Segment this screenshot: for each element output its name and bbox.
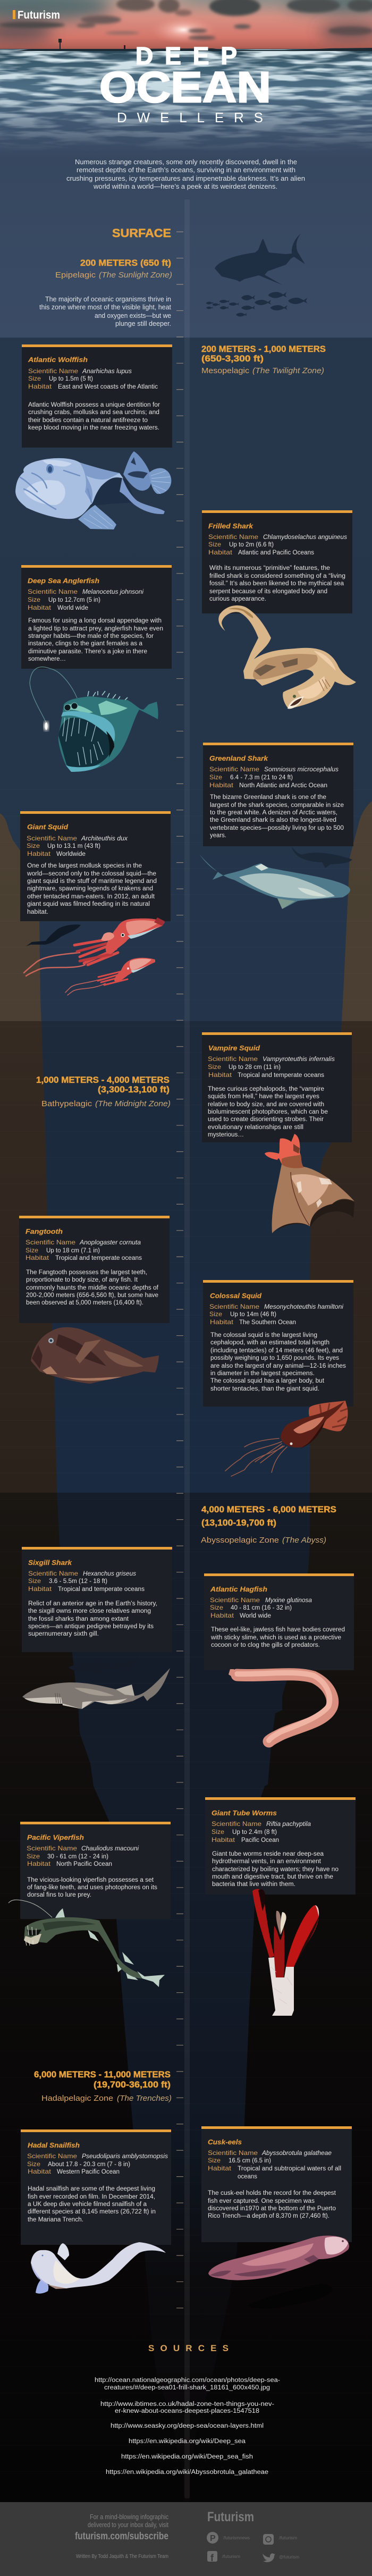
panel: Cusk-eels: Habitat (208, 2165, 232, 2172)
panel: Vampire Squid (202, 1032, 352, 1142)
panel: Greenland Shark: vertebrate species—possibly living for up to 500 (210, 825, 344, 831)
panel: Atlantic Wolffish: Size (28, 375, 41, 382)
panel: Colossal Squid: The Southern Ocean (239, 1319, 296, 1326)
panel: Colossal Squid: shorter tentacles, than the giant squid. (210, 1386, 319, 1392)
panel: Atlantic Wolffish: Atlantic Wolffish possess a unique dentition for (28, 402, 160, 408)
panel: Atlantic Hagfish: 40 - 81 cm (16 - 32 in) (231, 1605, 292, 1611)
text: source links: https://en.wikipedia.org/wiki/Abyssobrotula_galatheae (106, 2469, 268, 2476)
panel: Giant Squid: One of the largest mollusk species in the (27, 863, 142, 869)
panel: Cusk-eels: Cusk-eels (208, 2139, 242, 2146)
panel: Greenland Shark: Size (209, 773, 222, 781)
panel: Vampire Squid: Habitat (208, 1071, 232, 1079)
panel: Giant Squid: giant squid is the stuff of maritime legend and (27, 878, 157, 885)
panel: Hadal Snailfish: Hadal snailfish are some of the deepest living (28, 2186, 155, 2192)
panel: Fangtooth: Up to 18 cm (7.1 in) (46, 1248, 100, 1254)
panel: Colossal Squid: Colossal Squid (210, 1292, 261, 1300)
panel: Colossal Squid: The colossal squid is the largest living (210, 1332, 317, 1338)
icon: instagram: /futurism (279, 2536, 297, 2540)
panel: Colossal Squid: are also the largest of any animal—12-16 inches (210, 1363, 346, 1369)
icon: pinterest (207, 2532, 250, 2544)
panel: Hadal Snailfish: About 17.8 - 20.3 cm (7 - 8 in) (48, 2161, 130, 2168)
panel: Hadal Snailfish: Habitat (28, 2168, 52, 2175)
creature: atlantic hagfish (229, 1669, 333, 1741)
panel: Vampire Squid: mysterious… (208, 1132, 244, 1138)
panel: Giant Squid: Scientific Name (27, 835, 77, 842)
panel: Fangtooth: 200-2,000 meters (656-6,560 ft), but some have (26, 1292, 158, 1299)
heading: abyssopelagic: (The Abyss) (282, 1536, 326, 1545)
panel: Hadal Snailfish: a UK deep dive vehicle filmed snailfish of a (28, 2201, 147, 2208)
panel: Frilled Shark: Frilled Shark (208, 523, 253, 530)
creature: fangtooth (31, 1327, 159, 1384)
panel: Pacific Viperfish: The vicious-looking viperfish possesses a set (27, 1877, 154, 1883)
title (99, 42, 271, 125)
text: epipelagic description: The majority of oceanic organisms thrive in (45, 296, 171, 303)
panel: Fangtooth: commonly haunts the middle oceanic depths of (26, 1285, 159, 1291)
panel: Hadal Snailfish: Scientific Name (27, 2152, 77, 2160)
panel: Giant Squid: Giant Squid (27, 823, 68, 831)
panel: Cusk-eels: Tropical and subtropical waters of all (238, 2166, 341, 2172)
panel: Colossal Squid (203, 1280, 353, 1407)
panel: Atlantic Wolffish: Scientific Name (28, 367, 78, 375)
panel: Hadal Snailfish (21, 2129, 171, 2245)
panel: Vampire Squid: Scientific Name (208, 1055, 258, 1063)
panel: Atlantic Hagfish: Atlantic Hagfish (210, 1586, 267, 1593)
creature: sixgill shark with shadow (22, 1656, 170, 1709)
text: epipelagic description (39, 296, 172, 327)
intro text: Numerous strange creatures, some only recently discovered, dwell in the (75, 158, 297, 166)
creature: greenland shark pair (199, 847, 352, 909)
text: source links: http://ocean.nationalgeographic.com/ocean/photos/deep-sea- (95, 2377, 280, 2384)
creature: frilled shark (218, 605, 356, 709)
panel: Giant Tube Worms: Giant tube worms reside near deep-sea (212, 1851, 324, 1857)
panel: Atlantic Wolffish (22, 344, 172, 448)
panel: Frilled Shark: curious appearance. (209, 596, 266, 602)
panel: Sixgill Shark: Relict of an anterior age in the Earth’s history, (28, 1601, 157, 1607)
panel: Vampire Squid: squids from Hell,” have the largest eyes (208, 1093, 319, 1100)
panel: Sixgill Shark: Tropical and temperate oceans (58, 1586, 145, 1593)
panel: Sixgill Shark: Size (28, 1577, 41, 1585)
panel: Vampire Squid: Up to 28 cm (11 in) (229, 1064, 281, 1071)
panel: Frilled Shark: Up to 2m (6.6 ft) (229, 542, 274, 548)
panel: Cusk-eels: Scientific Name (208, 2149, 258, 2157)
text: epipelagic description: this zone where most of the visible light, heat (39, 304, 172, 311)
panel: Greenland Shark: The bizarre Greenland shark is one of the (210, 794, 326, 801)
icon: facebook: /futurism (222, 2554, 240, 2559)
creature: cusk-eel with shadow (208, 2236, 349, 2309)
panel: Giant Tube Worms (205, 1797, 356, 1895)
creature: giant squid pair (24, 917, 165, 995)
panel: Hadal Snailfish: different species at 8,145 meters (26,722 ft) in (28, 2209, 156, 2215)
panel: Frilled Shark: Habitat (208, 549, 233, 556)
text: source links: creatures/#/deep-sea01-frill-shark_18161_600x450.jpg (104, 2385, 270, 2391)
intro text: remotest depths of the Earth’s oceans, surviving in an environment with (77, 166, 295, 174)
panel: Colossal Squid: Size (209, 1310, 222, 1318)
title: OCEAN (99, 63, 271, 112)
logo: Futurism: Futurism (18, 9, 60, 21)
panel: Pacific Viperfish: Habitat (27, 1860, 51, 1867)
heading: 200 meters epipelagic: Epipelagic (55, 271, 96, 280)
panel: Giant Squid (20, 811, 171, 921)
panel: Vampire Squid: used to create disorienting strobes. Their (208, 1116, 324, 1123)
icon: instagram (263, 2534, 297, 2545)
panel: Fangtooth: Tropical and temperate oceans (55, 1255, 142, 1261)
icon: pinterest: P (210, 2534, 216, 2543)
panel: Giant Squid: Size (27, 842, 40, 849)
panel: Pacific Viperfish: Scientific Name (27, 1845, 77, 1852)
panel: Colossal Squid: Scientific Name (209, 1303, 259, 1310)
panel: Greenland Shark: Somniosus microcephalus (264, 767, 339, 773)
panel: Hadal Snailfish: Pseudoliparis amblystomopsis (82, 2153, 168, 2160)
panel: Giant Squid: habitat. (27, 909, 48, 915)
panel: Giant Squid: Worldwide (56, 851, 86, 857)
panel: Colossal Squid: in diameter in the largest specimens. (210, 1370, 315, 1377)
panel: Hadal Snailfish: Western Pacific Ocean (57, 2169, 120, 2175)
heading: mesopelagic: (650-3,300 ft) (201, 354, 264, 364)
panel: Giant Tube Worms: hydrothermal vents, in an environment (212, 1858, 322, 1865)
panel: Deep Sea Anglerfish: World wide (57, 605, 88, 611)
heading: 200 meters epipelagic: (The Sunlight Zone) (99, 271, 172, 280)
panel: Fangtooth: Anoplogaster cornuta (79, 1240, 141, 1246)
panel: Atlantic Wolffish: East and West coasts of the Atlantic (58, 384, 158, 390)
panel: Vampire Squid: Tropical and temperate oceans (238, 1072, 324, 1079)
panel: Deep Sea Anglerfish (21, 565, 172, 669)
icon: twitter (263, 2553, 299, 2562)
heading: hadalpelagic: Hadalpelagic Zone (41, 2094, 113, 2103)
panel: Deep Sea Anglerfish: somewhere… (28, 656, 66, 662)
panel: Deep Sea Anglerfish: diminutive parasite. There’s a joke in there (28, 649, 147, 655)
creature: colossal squid (225, 1401, 348, 1476)
panel: Colossal Squid: possibly weighing up to 1,650 pounds. Its eyes (210, 1355, 339, 1361)
logo: footer Futurism: Futurism (207, 2510, 254, 2524)
panel: Deep Sea Anglerfish: a lighted tip to attract prey, anglerfish have even (28, 626, 163, 632)
panel: Atlantic Hagfish: cocoon or to clog the gills of predators. (211, 1642, 320, 1648)
panel: Giant Tube Worms: Habitat (212, 1836, 235, 1843)
panel: Sixgill Shark: supernumerary sixth gill. (28, 1631, 99, 1637)
panel: Cusk-eels: 16.5 cm (6.5 in) (229, 2158, 271, 2164)
panel: Frilled Shark: serpent because of its elongated body and (209, 588, 327, 595)
panel: Cusk-eels: Rico Trench—a depth of 8,370 m (27,460 ft). (208, 2213, 329, 2219)
panel: Colossal Squid: cephalopod, with an estimated total length (210, 1340, 329, 1346)
panel: Deep Sea Anglerfish: stranger habits—the male of the species, for (28, 633, 154, 639)
panel: Atlantic Hagfish (204, 1573, 354, 1670)
creature: vampire squid (265, 1134, 354, 1233)
heading: hadalpelagic: (The Trenches) (117, 2094, 172, 2103)
heading: abyssopelagic: Abyssopelagic Zone (201, 1536, 279, 1545)
panel: Atlantic Wolffish: Atlantic Wolffish (28, 356, 88, 364)
panel: Cusk-eels: The cusk-eel holds the record for the deepest (208, 2190, 336, 2196)
panel: footer (0, 2502, 372, 2576)
panel: Sixgill Shark: 3.6 - 5.5m (12 - 18 ft) (49, 1578, 107, 1585)
panel: Greenland Shark: years. (210, 832, 226, 839)
title: DWELLERS (117, 110, 263, 125)
panel: Vampire Squid: evolutionary relationships are still (208, 1124, 303, 1131)
panel: Deep Sea Anglerfish: Habitat (28, 604, 52, 611)
panel: Deep Sea Anglerfish: Scientific Name (28, 588, 78, 595)
panel: Deep Sea Anglerfish: Famous for using a long dorsal appendage with (28, 618, 162, 624)
text: epipelagic description: plunge still deeper. (115, 320, 171, 327)
intro text (66, 158, 305, 190)
panel: Fangtooth: Size (26, 1247, 38, 1254)
text: subscribe call to action: delivered to your inbox daily, visit (88, 2521, 168, 2529)
heading: 200 meters epipelagic (55, 258, 172, 280)
panel: Deep Sea Anglerfish: Deep Sea Anglerfish (28, 577, 99, 585)
panel: Fangtooth: Habitat (26, 1254, 49, 1261)
panel: Giant Squid: Architeuthis dux (81, 836, 128, 842)
panel: Pacific Viperfish: North Pacific Ocean (56, 1861, 112, 1867)
icon: facebook: f (210, 2553, 214, 2563)
icon: twitter: @futurism (279, 2555, 299, 2560)
panel: Vampire Squid: relative to body size, and are covered with (208, 1101, 324, 1108)
icon: facebook (207, 2551, 240, 2563)
hero: sunset sky and ocean photo (0, 0, 372, 161)
panel: Pacific Viperfish: Size (27, 1853, 40, 1860)
heading: 200 meters epipelagic: 200 METERS (650 ft) (80, 258, 171, 268)
panel: Fangtooth: been observed at 5,000 meters (16,400 ft). (26, 1300, 143, 1306)
panel: Atlantic Wolffish: crushing crabs, mollusks and sea urchins; and (28, 409, 159, 416)
panel: Colossal Squid: Up to 14m (46 ft) (230, 1311, 276, 1318)
panel: Colossal Squid: The colossal squid has a larger body, but (210, 1378, 325, 1384)
panel: Hadal Snailfish: fish ever recorded on film. In December 2014, (28, 2194, 155, 2200)
panel: Atlantic Hagfish: World wide (240, 1613, 271, 1619)
icon: fish school silhouettes (206, 292, 307, 317)
panel: Greenland Shark: North Atlantic and Arctic Ocean (239, 782, 327, 789)
panel: Colossal Squid: Mesonychoteuthis hamiltoni (264, 1304, 343, 1310)
panel: Vampire Squid: bioluminescent photophores, which can be (208, 1109, 328, 1115)
panel: Sixgill Shark: Scientific Name (28, 1570, 78, 1577)
panel: Hadal Snailfish: Hadal Snailfish (28, 2142, 80, 2149)
panel: Frilled Shark: Size (208, 541, 221, 548)
panel: Fangtooth: proportionate to body size, of any fish. It (26, 1277, 138, 1283)
text: subscribe call to action: futurism.com/subscribe (75, 2531, 168, 2542)
icon: pinterest: /futurismnews (223, 2536, 250, 2540)
panel: Deep Sea Anglerfish: instance, clings to the giant females as a (28, 641, 143, 647)
text: source links: http://www.seasky.org/deep-sea/ocean-layers.html (111, 2423, 264, 2429)
panel: Sixgill Shark: Hexanchus griseus (83, 1571, 136, 1577)
panel: Pacific Viperfish: of fang-like teeth, and uses photophores on its (27, 1884, 157, 1891)
heading: bathypelagic: Bathypelagic (41, 1099, 92, 1108)
panel: Atlantic Hagfish: with sticky slime, which is used as a protective (210, 1635, 341, 1641)
text: source links: er-knew-about-oceans-deepest-places-1547518 (115, 2408, 259, 2414)
creature: hadal snailfish (31, 2242, 166, 2294)
panel: Fangtooth: Scientific Name (26, 1239, 75, 1246)
panel: Cusk-eels: oceans (238, 2174, 257, 2180)
panel: Colossal Squid: (including tentacles) of 14 meters (46 feet), and (210, 1348, 343, 1354)
panel: Atlantic Wolffish: Anarhichas lupus (82, 368, 132, 375)
heading: bathypelagic: 1,000 METERS - 4,000 METERS (36, 1075, 170, 1085)
panel: Frilled Shark: With its numerous “primitive” features, the (209, 565, 330, 571)
panel: Cusk-eels: Size (208, 2157, 221, 2164)
panel: Pacific Viperfish: 30 - 61 cm (12 - 24 in) (47, 1854, 108, 1860)
panel: Sixgill Shark: the fossil sharks than among extant (28, 1616, 129, 1622)
panel: Giant Tube Worms: Pacific Ocean (241, 1837, 279, 1843)
heading: surface: SURFACE (112, 226, 171, 240)
panel: Atlantic Wolffish: their bodies contain a natural antifreeze to (28, 417, 148, 424)
text: source links (95, 2377, 280, 2476)
panel: Atlantic Hagfish: Habitat (210, 1612, 234, 1619)
panel: Giant Tube Worms: bacteria that live within them. (212, 1881, 295, 1888)
panel: Pacific Viperfish: Pacific Viperfish (27, 1834, 84, 1841)
panel: Greenland Shark: the Greenland shark is also the longest-lived (210, 817, 336, 823)
panel: Pacific Viperfish (20, 1822, 171, 1919)
panel: Atlantic Hagfish: Myxine glutinosa (265, 1597, 312, 1604)
panel: Giant Tube Worms: Scientific Name (212, 1820, 261, 1828)
panel: Giant Tube Worms: Up to 2.4m (8 ft) (232, 1829, 277, 1836)
text: subscribe call to action (75, 2513, 168, 2560)
text: source links: http://www.ibtimes.co.uk/hadal-zone-ten-things-you-nev- (100, 2401, 274, 2407)
panel: Greenland Shark: 6.4 - 7.3 m (21 to 24 ft) (230, 775, 293, 781)
text: subscribe call to action: Written By Todd Jaquith & The Futurism Team (76, 2553, 168, 2560)
heading: mesopelagic (201, 344, 326, 375)
panel: Frilled Shark: Atlantic and Pacific Oceans (238, 550, 314, 556)
panel: Giant Squid: other tentacled man-eaters. In 2012, an adult (27, 894, 155, 900)
panel: Vampire Squid: These curious cephalopods, the “vampire (208, 1086, 324, 1092)
panel: Giant Tube Worms: Giant Tube Worms (212, 1809, 277, 1817)
text: epipelagic description: and oxygen exists—but we (95, 312, 171, 319)
panel: Greenland Shark (203, 743, 353, 846)
heading: abyssopelagic (201, 1505, 336, 1545)
panel: Giant Squid: Habitat (27, 850, 51, 857)
panel: Cusk-eels: fish ever captured. One specimen was (208, 2198, 315, 2204)
heading: bathypelagic: (The Midnight Zone) (95, 1099, 171, 1108)
text: source links: https://en.wikipedia.org/wiki/Deep_sea_fish (121, 2454, 253, 2460)
panel: Greenland Shark: to the great white. A denizen of Arctic waters, (210, 810, 337, 816)
heading: mesopelagic: 200 METERS - 1,000 METERS (201, 344, 326, 354)
panel: Sixgill Shark: Sixgill Shark (28, 1559, 72, 1567)
panel: Atlantic Hagfish: Scientific Name (210, 1596, 260, 1604)
creature: Atlantic wolffish (15, 451, 171, 529)
heading: bathypelagic: (3,300-13,100 ft) (98, 1085, 170, 1095)
icon: shark silhouette (215, 233, 305, 285)
panel: Frilled Shark (202, 510, 352, 613)
panel: Atlantic Hagfish: These eel-like, jawless fish have bodies covered (211, 1627, 345, 1633)
heading: bathypelagic (36, 1075, 171, 1108)
panel: Giant Squid: Up to 13.1 m (43 ft) (47, 843, 100, 849)
panel: Giant Tube Worms: Size (212, 1828, 224, 1836)
panel: Giant Tube Worms: mouth and digestive tract, but thrive on the (212, 1874, 333, 1880)
panel: Frilled Shark: frilled shark is considered something of a “living (209, 573, 345, 579)
panel: Pacific Viperfish: dorsal fins to lure prey. (27, 1892, 91, 1898)
heading: hadalpelagic: (19,700-36,100 ft) (94, 2080, 171, 2090)
panel: Giant Squid: nightmare, spawning legends of krakens and (27, 886, 153, 892)
panel: Greenland Shark: Habitat (209, 781, 234, 789)
panel: Fangtooth: The Fangtooth possesses the largest teeth, (26, 1269, 147, 1276)
text: source links: https://en.wikipedia.org/wiki/Deep_sea (129, 2438, 246, 2445)
panel: Greenland Shark: Scientific Name (209, 765, 259, 773)
panel: Fangtooth: Fangtooth (26, 1228, 63, 1235)
heading: abyssopelagic: (13,100-19,700 ft) (201, 1518, 276, 1528)
panel: Frilled Shark: Scientific Name (208, 533, 258, 541)
panel: Deep Sea Anglerfish: Up to 12.7cm (5 in) (48, 597, 100, 603)
panel: Atlantic Wolffish: keep blood moving in the near freezing waters. (28, 425, 159, 431)
panel: Vampire Squid: Size (208, 1063, 221, 1071)
text: subscribe call to action: For a mind-blowing infographic (90, 2513, 168, 2521)
heading: hadalpelagic (34, 2070, 172, 2103)
panel: Cusk-eels (201, 2126, 352, 2242)
panel: Cusk-eels: Abyssobrotula galatheae (261, 2150, 332, 2157)
heading: hadalpelagic: 6,000 METERS - 11,000 METERS (34, 2070, 171, 2080)
heading: mesopelagic: (The Twilight Zone) (252, 366, 324, 375)
panel: Vampire Squid: Vampire Squid (208, 1045, 260, 1052)
intro text: world within a world—here’s a peek at its weirdest denizens. (93, 183, 277, 190)
panel: Fangtooth (19, 1216, 170, 1323)
panel: Greenland Shark: Greenland Shark (209, 755, 268, 762)
panel: Pacific Viperfish: Chauliodus macouni (81, 1846, 139, 1852)
panel: Sixgill Shark: the sixgill owns more close relatives among (28, 1608, 151, 1614)
panel: Atlantic Hagfish: Size (210, 1604, 223, 1611)
intro text: crushing pressures, icy temperatures and impenetrable darkness. It’s an alien (66, 175, 305, 182)
panel: Sixgill Shark (22, 1547, 172, 1652)
creature: pacific viperfish (9, 1900, 165, 1987)
panel: Deep Sea Anglerfish: Melanocetus johnsoni (82, 589, 143, 595)
panel: Sixgill Shark: species—an antique pedigree betrayed by its (28, 1623, 154, 1630)
panel: Deep Sea Anglerfish: Size (28, 596, 40, 603)
panel: Hadal Snailfish: Size (27, 2160, 40, 2168)
panel: Atlantic Wolffish: Habitat (28, 383, 52, 390)
panel: Giant Tube Worms: Riftia pachyptila (266, 1821, 311, 1828)
panel: Giant Squid: giant squid was filmed feeding in its natural (27, 901, 150, 907)
heading: mesopelagic: Mesopelagic (201, 366, 250, 375)
panel: Vampire Squid: Vampyroteuthis infernalis (263, 1056, 335, 1063)
panel: Giant Tube Worms: characterized by boiling waters; they have no (212, 1866, 339, 1873)
heading: abyssopelagic: 4,000 METERS - 6,000 METERS (201, 1505, 336, 1514)
panel: Frilled Shark: fossil.” It’s also been likened to the mythical sea (209, 580, 344, 587)
creature: giant tube worms (252, 1889, 319, 2016)
panel: Frilled Shark: Chlamydoselachus anguineus (263, 534, 347, 541)
panel: Atlantic Wolffish: Up to 1.5m (5 ft) (49, 376, 93, 382)
panel: Sixgill Shark: Habitat (28, 1585, 52, 1593)
heading: sources: SOURCES (148, 2343, 229, 2353)
panel: Giant Squid: world—second only to the colossal squid—the (27, 871, 156, 877)
panel: Cusk-eels: discovered in1970 at the bottom of the Puerto (208, 2205, 336, 2212)
panel: Colossal Squid: Habitat (210, 1318, 234, 1326)
panel: Hadal Snailfish: the Mariana Trench. (28, 2217, 83, 2223)
title: DEEP (136, 42, 237, 70)
depth ruler (180, 199, 190, 2498)
creature: anglerfish with lure (30, 667, 158, 772)
panel: Greenland Shark: largest of the shark species, comparable in size (210, 802, 344, 809)
